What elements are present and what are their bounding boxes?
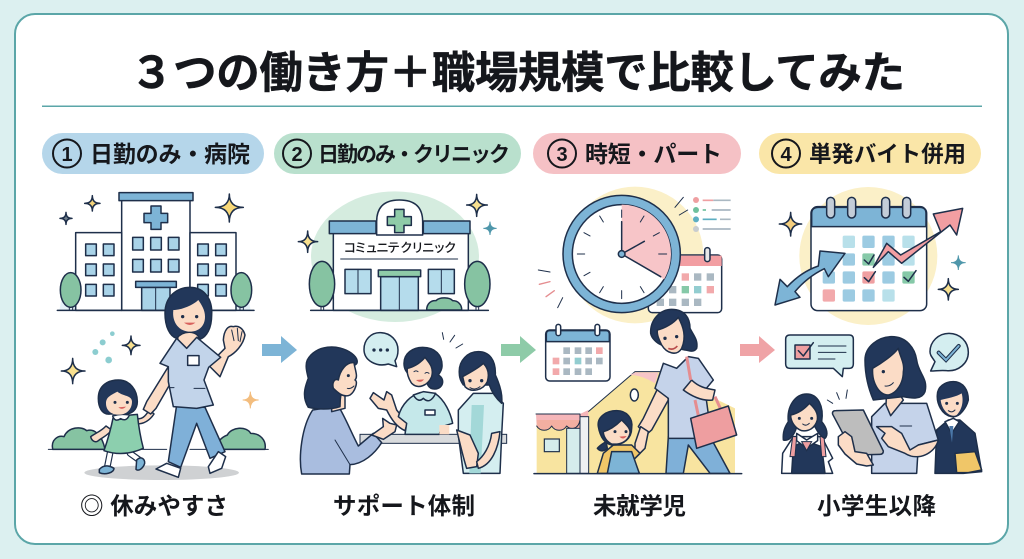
calendar [648,248,722,313]
illustration: reception conversation [300,333,507,474]
parent [832,337,938,473]
pill: option 1 heading [42,133,264,174]
illustration: community clinic: コミュニテ クリニック [343,241,457,255]
checklist [693,197,731,232]
child with overalls [597,411,648,473]
pill: option 3 heading: 時短・パート [585,141,722,167]
girl with backpack [782,394,833,473]
illustration: community clinic [298,191,497,322]
small calendar [546,324,610,381]
nurse [143,287,245,477]
sparkles [61,331,259,408]
illustration: calendar with arrows [775,187,966,325]
pill: option 4 heading: 4 [780,144,792,166]
patient seen from behind [300,347,397,474]
blue double arrow [775,251,845,305]
illustration: nurse walking with child [48,287,268,480]
illustration: preschool drop-off [534,309,742,474]
arrow: 3 to 4 [740,336,775,363]
illustration: clock with calendar [538,187,731,323]
label: support system: サポート体制 [333,493,475,519]
arrow: 2 to 3 [501,336,536,363]
bushes and ground [48,428,268,449]
colleague in white coat [457,352,503,473]
pill: option 2 heading [274,133,521,174]
child [91,380,154,474]
pill: option 3 heading: 3 [556,144,568,166]
preschool building [534,372,742,474]
illustration: hospital [57,193,254,310]
red rising arrow [873,208,963,267]
label: elementary and beyond: 小学生以降 [817,493,936,519]
clock [563,195,680,313]
title: ３つの働き方＋職場規模で比較してみた [130,50,905,98]
pill: option 2 heading: 2 [291,144,303,166]
arrow: 1 to 2 [262,336,297,363]
pill: option 3 heading [533,133,741,174]
pill: option 1 heading: 1 [61,144,73,166]
mother [638,309,737,473]
illustration: parent with tablet and school children [782,333,982,473]
pill: option 2 heading: 日勤のみ・クリニック [318,144,510,166]
pill: option 4 heading: 単発バイト併用 [809,142,966,167]
pill: option 1 heading: 日勤のみ・病院 [90,141,250,167]
counter [360,434,507,443]
boy in suit [935,382,982,473]
pill: option 4 heading [759,133,981,174]
label: restability: ◎ 休みやすさ [80,493,228,519]
checklist bubble [786,335,853,377]
speech bubble [364,333,398,367]
check bubble [930,333,968,371]
label: preschool children: 未就学児 [593,493,686,519]
receptionist [370,347,453,434]
